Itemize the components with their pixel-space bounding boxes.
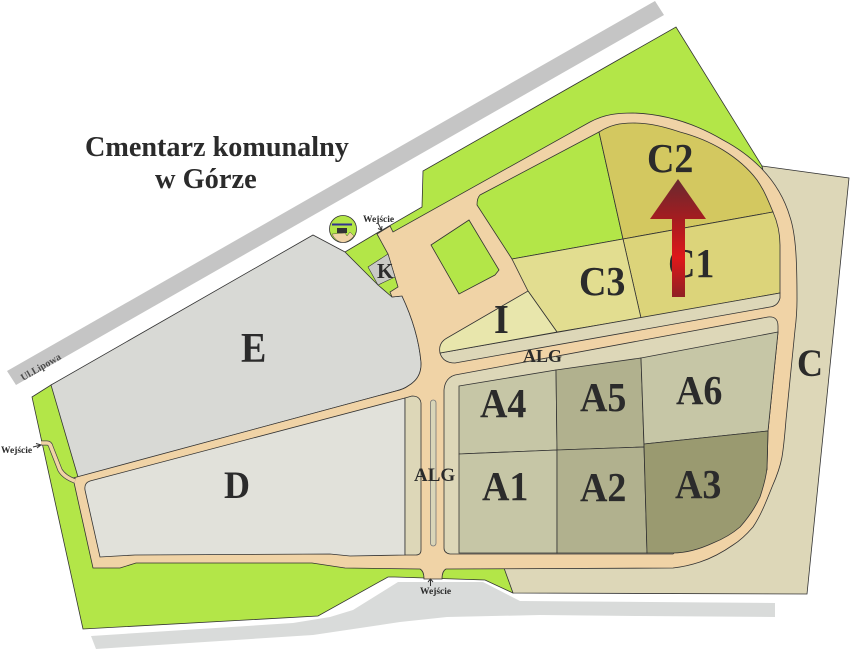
sector A3: A3 xyxy=(675,462,721,507)
sector D xyxy=(85,398,405,557)
alley strip centre xyxy=(430,400,436,546)
sector A2: A2 xyxy=(580,465,626,510)
sector C2: C2 xyxy=(647,136,693,181)
sector E: E xyxy=(241,324,266,371)
title xyxy=(85,132,349,195)
green field north xyxy=(477,132,623,259)
label: north entrance xyxy=(363,215,394,230)
sector I xyxy=(440,291,557,353)
label: south entrance xyxy=(420,579,451,597)
sector A3 xyxy=(644,431,768,553)
road: bottom access road xyxy=(91,582,775,649)
label: south entrance: Wejście xyxy=(420,587,451,597)
label: west entrance xyxy=(1,444,41,456)
title: Cmentarz komunalny xyxy=(85,132,349,163)
sector C1: C1 xyxy=(668,241,714,286)
label: ALG west: ALG xyxy=(414,465,455,486)
sector C3: C3 xyxy=(579,259,625,304)
label: ALG north: ALG xyxy=(523,346,562,366)
sector A1: A1 xyxy=(482,464,528,509)
sector E xyxy=(51,235,421,477)
label: west entrance: Wejście xyxy=(1,446,32,456)
arrow: north xyxy=(650,179,706,297)
paths: tan alleys xyxy=(73,113,797,579)
sector C1 xyxy=(623,212,780,318)
kiosk K: K xyxy=(377,259,394,283)
sector A4 xyxy=(459,370,557,454)
road: ul. Lipowa: Ul.Lipowa xyxy=(19,352,63,384)
alley strip west xyxy=(405,396,421,555)
alley strip north xyxy=(440,293,780,363)
title: w Górze xyxy=(155,164,257,195)
sector A4: A4 xyxy=(480,381,527,426)
sector D: D xyxy=(224,463,250,507)
sector C3 xyxy=(512,239,641,332)
sector C xyxy=(504,166,849,594)
sector C2 xyxy=(599,123,773,239)
sector A5 xyxy=(556,358,644,450)
sector A6 xyxy=(641,332,778,444)
sector A1 xyxy=(459,450,557,553)
sector C: C xyxy=(797,343,823,385)
sector I: I xyxy=(494,297,509,342)
kiosk K xyxy=(368,254,395,285)
sector A5: A5 xyxy=(580,375,626,420)
green square xyxy=(431,220,499,294)
path: west entrance footpath xyxy=(41,443,75,481)
sector A6: A6 xyxy=(676,368,722,413)
icon: cemetery medallion xyxy=(330,216,356,242)
sector A2 xyxy=(557,447,647,553)
alley around A sectors xyxy=(444,317,778,554)
label: north entrance: Wejście xyxy=(363,215,394,225)
